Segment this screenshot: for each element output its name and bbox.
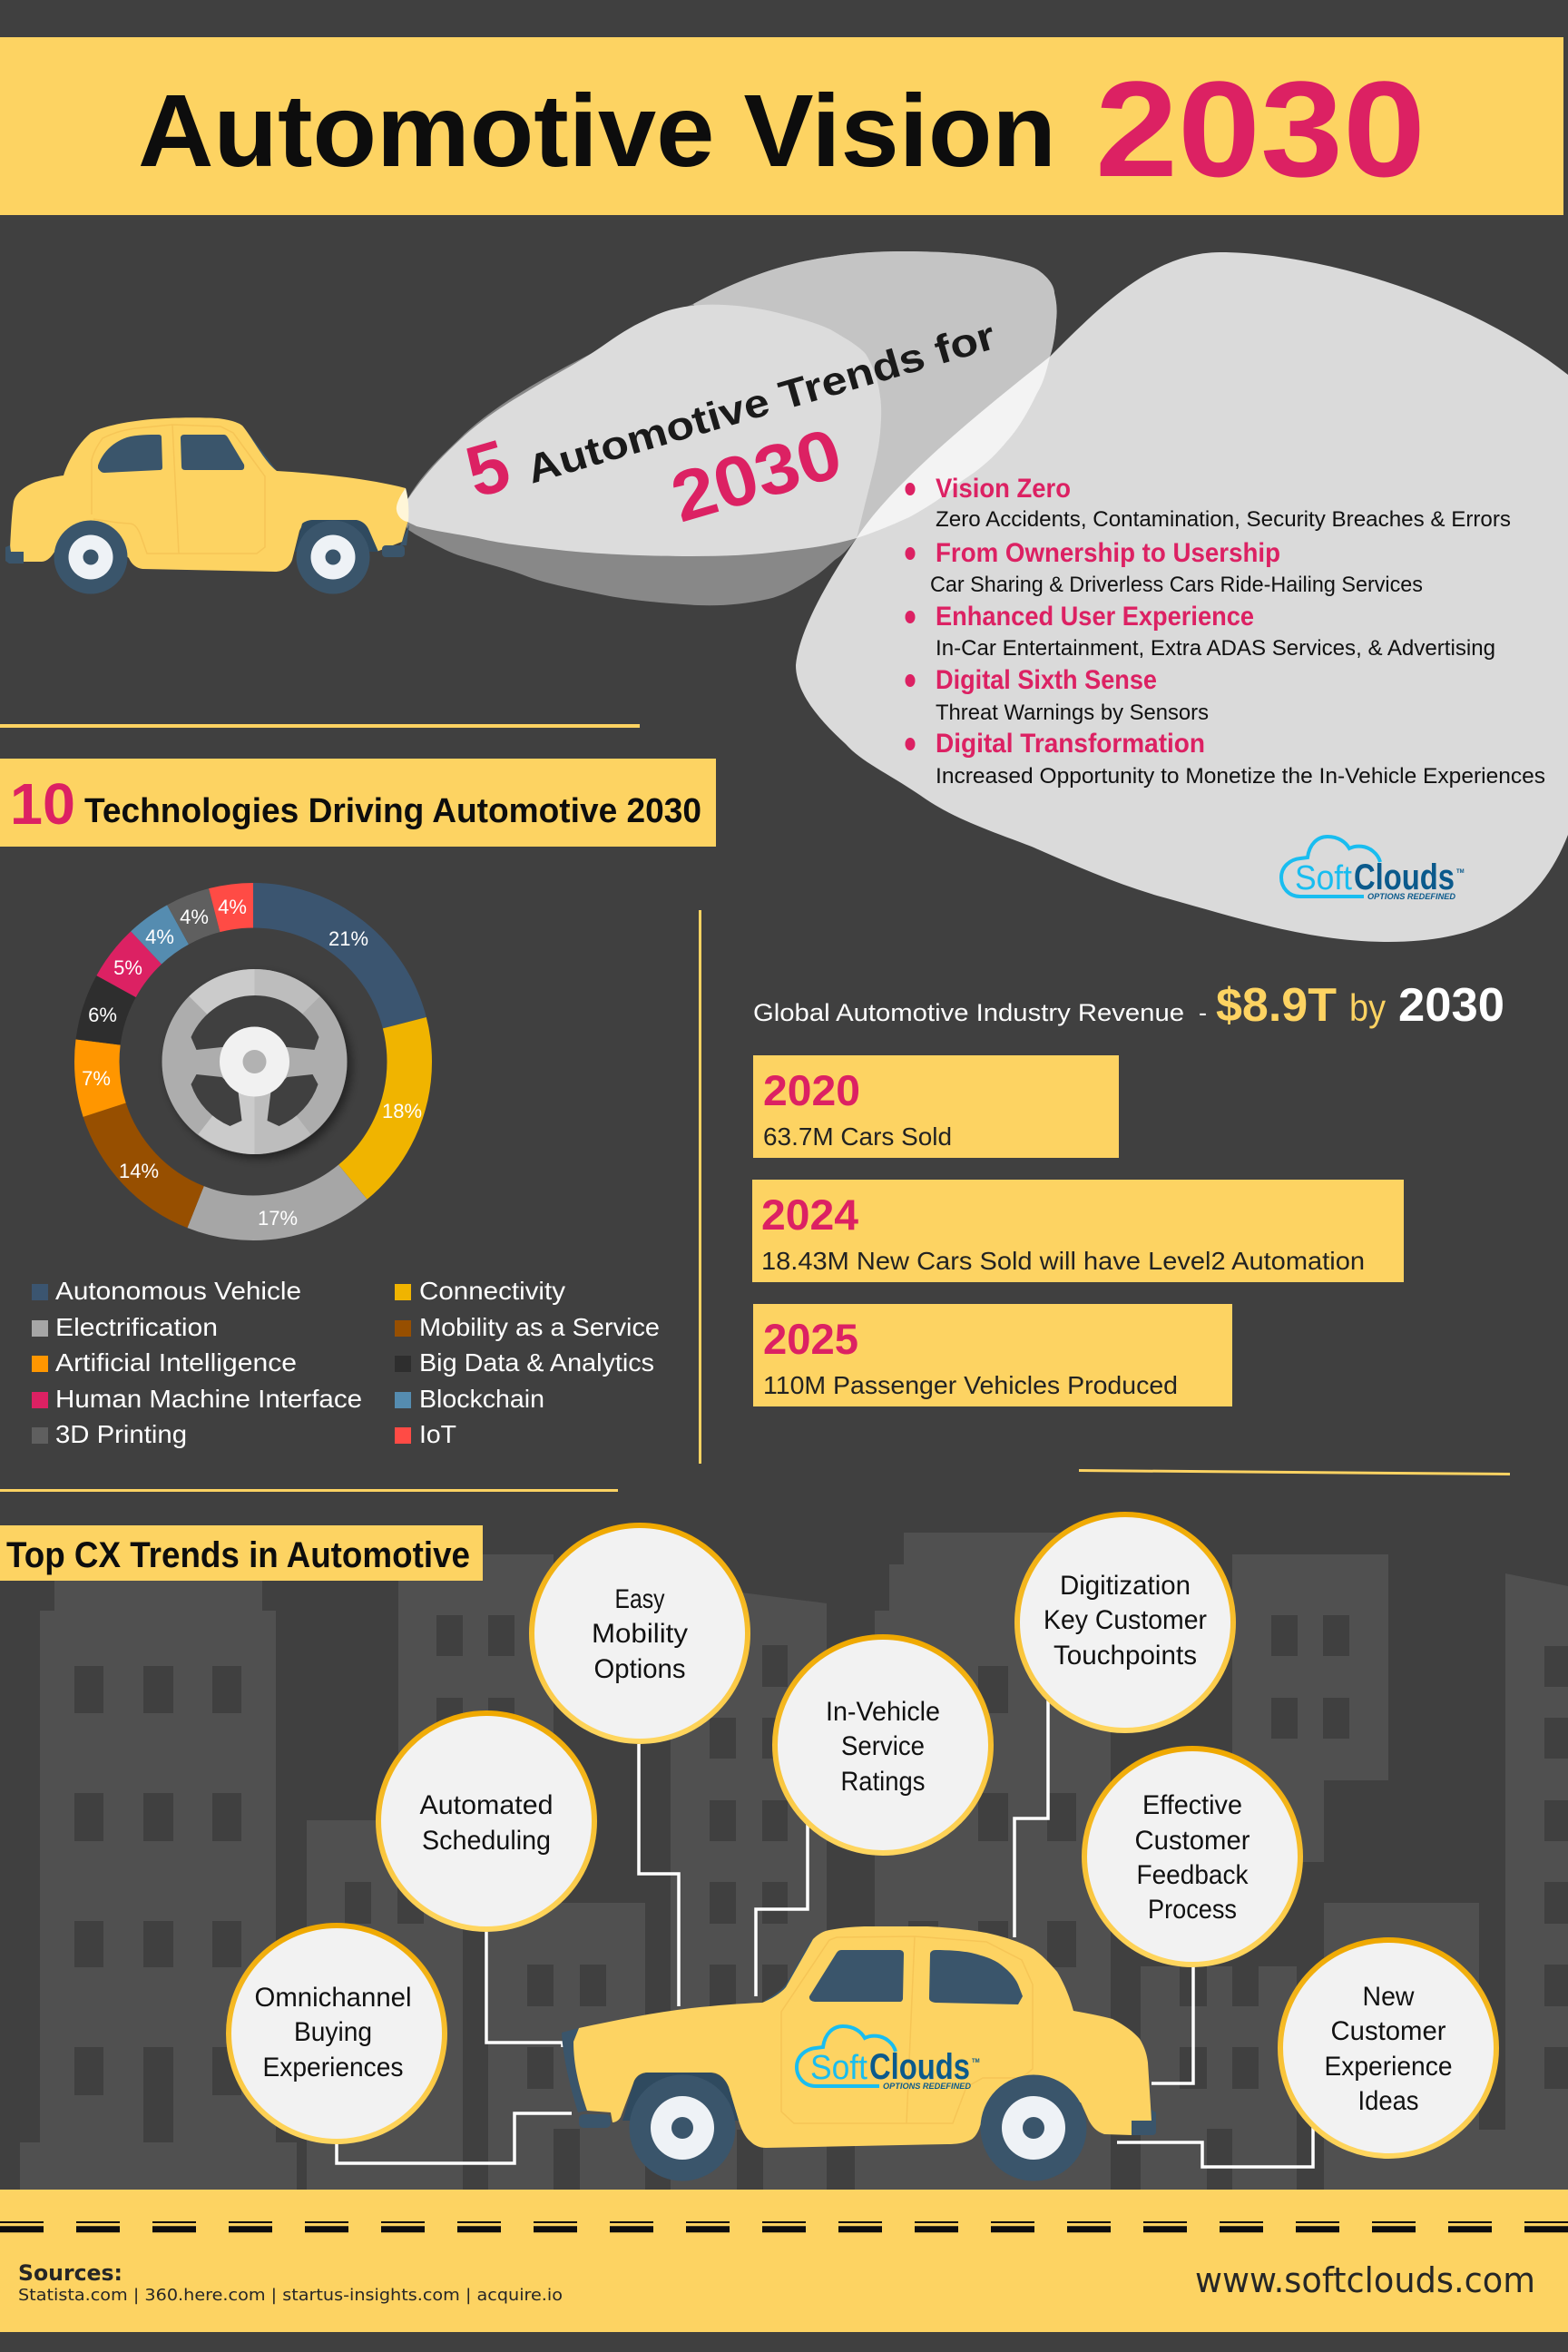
numeral 5: 5 [457, 424, 518, 513]
road band [0, 2190, 1568, 2332]
bubble: omnichannel: Buying [294, 2017, 372, 2047]
bar: 2024 [752, 1180, 1404, 1282]
bar: 2025: 110M Passenger Vehicles Produced [763, 1371, 1178, 1399]
bar: 2020: 2020 [763, 1066, 860, 1114]
bubble: easy mobility [532, 1525, 748, 1741]
trend 5 [906, 729, 1545, 789]
legend left column [32, 1277, 362, 1448]
bubble: in-vehicle ratings: In-Vehicle [826, 1697, 940, 1727]
bubble: omnichannel [229, 1926, 445, 2141]
trend 1: Vision Zero [936, 474, 1071, 504]
trend 5: Digital Transformation [936, 729, 1205, 759]
divider: vertical [699, 910, 701, 1464]
legend left column: Electrification [55, 1313, 218, 1341]
trends list [906, 474, 1545, 789]
bar: 2020: 63.7M Cars Sold [763, 1122, 952, 1151]
legend right column: Big Data & Analytics [419, 1348, 654, 1377]
sources: Statista.com | 360.here.com | startus-insights.com | acquire.io [18, 2286, 563, 2305]
revenue figure: $8.9T [1216, 979, 1337, 1032]
trend 1 [906, 474, 1511, 532]
trend 4: Digital Sixth Sense [936, 665, 1157, 695]
bar: 2020 [753, 1055, 1119, 1158]
bubble: in-vehicle ratings [775, 1637, 991, 1853]
bar: 2025 [753, 1304, 1232, 1406]
car: side view with headlights [5, 417, 409, 593]
bubble: digitization: Digitization [1060, 1571, 1191, 1601]
title year: 2030 [1095, 53, 1426, 205]
logo: SoftClouds on car: Soft [810, 2049, 867, 2087]
legend right column: Blockchain [419, 1385, 544, 1413]
donut percentage labels: 7% [82, 1067, 111, 1090]
title text: Automotive Vision [138, 74, 1056, 188]
donut percentage labels: 4% [145, 926, 174, 948]
banner text: Technologies Driving Automotive 2030 [84, 792, 701, 830]
bubble: in-vehicle ratings: Ratings [840, 1767, 926, 1797]
heading year: 2030 [662, 413, 850, 537]
trend 5: Increased Opportunity to Monetize the In-Vehicle Experiences [936, 764, 1545, 789]
logo: SoftClouds on blob [1281, 837, 1465, 901]
legend right column: Connectivity [419, 1277, 565, 1305]
revenue headline: - [1199, 999, 1207, 1026]
bubble: omnichannel: Omnichannel [254, 1983, 412, 2013]
donut percentage labels: 18% [382, 1100, 422, 1122]
bubble: new CX ideas: Customer [1330, 2016, 1446, 2046]
bubble: automated scheduling: Scheduling [422, 1826, 551, 1856]
donut percentage labels: 17% [258, 1207, 298, 1230]
divider: lower left [0, 1489, 618, 1492]
bubble: in-vehicle ratings: Service [841, 1731, 925, 1761]
trends blob [796, 252, 1568, 942]
car: side view with logo [562, 1926, 1156, 2181]
bubble: digitization: Touchpoints [1054, 1641, 1197, 1671]
banner numeral: 10 [10, 771, 75, 837]
trend 4: Threat Warnings by Sensors [936, 701, 1209, 725]
bubble: digitization: Key Customer [1044, 1605, 1207, 1635]
bubble: feedback: Feedback [1136, 1860, 1249, 1890]
logo: SoftClouds on blob: Clouds [1354, 858, 1455, 897]
bubble: feedback: Effective [1142, 1790, 1242, 1820]
trend 2: From Ownership to Usership [936, 538, 1280, 568]
beam highlight on nose [397, 488, 408, 522]
logo: SoftClouds on car [797, 2026, 980, 2091]
section banner: 10 technologies [0, 759, 716, 847]
website url: www.softclouds.com [1195, 2260, 1535, 2300]
connector lines [337, 1700, 1313, 2167]
section banner: top CX trends: Top CX Trends in Automotive [6, 1535, 470, 1575]
legend left column: 3D Printing [55, 1420, 187, 1448]
trend 2: Car Sharing & Driverless Cars Ride-Hailing Services [930, 573, 1423, 597]
heading line: Automotive Trends for [522, 313, 1000, 493]
trend 2 [906, 538, 1423, 597]
donut percentage labels: 21% [328, 927, 368, 950]
trend 3 [906, 602, 1495, 661]
bubble: new CX ideas: Ideas [1357, 2086, 1419, 2116]
legend [32, 1277, 660, 1448]
bubble: digitization [1017, 1514, 1233, 1730]
bubble: new CX ideas: Experience [1325, 2052, 1452, 2082]
donut percentage labels: 14% [119, 1160, 159, 1182]
trend 1: Zero Accidents, Contamination, Security Breaches & Errors [936, 507, 1511, 532]
logo: SoftClouds on blob: TM [1456, 869, 1465, 875]
bubble: feedback: Process [1148, 1895, 1237, 1925]
donut percentage labels: 6% [88, 1004, 117, 1026]
trend 3: In-Car Entertainment, Extra ADAS Services, & Advertising [936, 636, 1495, 661]
bubble: feedback [1084, 1749, 1300, 1965]
logo: SoftClouds on blob: Soft [1295, 859, 1352, 897]
donut percentage labels: 4% [218, 896, 247, 918]
divider: upper left [0, 724, 640, 728]
icon: steering wheel [162, 969, 347, 1154]
bubble: new CX ideas: New [1363, 1982, 1415, 2012]
donut percentage labels: 5% [113, 956, 142, 979]
logo: SoftClouds on blob: OPTIONS REDEFINED [1367, 892, 1456, 901]
legend right column [395, 1277, 660, 1448]
donut percentage labels: 4% [180, 906, 209, 928]
donut percentage labels [82, 896, 422, 1230]
trend 3: Enhanced User Experience [936, 602, 1254, 632]
sources: Sources: [18, 2260, 122, 2286]
headlight beams [403, 251, 1057, 605]
sources [18, 2260, 563, 2305]
bubble: new CX ideas [1280, 1940, 1496, 2156]
bubble: easy mobility: Easy [615, 1584, 664, 1614]
logo: SoftClouds on car: TM [972, 2059, 980, 2064]
donut chart [97, 906, 409, 1218]
bar: 2024: 2024 [761, 1191, 858, 1239]
legend left column: Human Machine Interface [55, 1385, 362, 1413]
bubble: omnichannel: Experiences [263, 2053, 403, 2082]
revenue headline: Global Automotive Industry Revenue [753, 999, 1184, 1026]
section banner: top CX trends [0, 1525, 483, 1581]
bar: 2025: 2025 [763, 1315, 858, 1363]
bubble: automated scheduling: Automated [419, 1790, 554, 1820]
legend left column: Autonomous Vehicle [55, 1277, 301, 1305]
city skyline background [20, 1533, 1568, 2190]
logo: SoftClouds on car: OPTIONS REDEFINED [883, 2082, 972, 2091]
logo: SoftClouds on car: Clouds [869, 2047, 970, 2087]
bubble: easy mobility: Mobility [592, 1619, 688, 1649]
road markings [0, 2221, 1568, 2223]
legend right column: IoT [419, 1420, 456, 1448]
title band [0, 37, 1563, 215]
divider: right [1079, 1469, 1510, 1475]
revenue headline: by [1349, 986, 1386, 1029]
beam and blob overlap [857, 357, 1050, 538]
heading: 5 automotive trends [457, 313, 1000, 537]
bubble: easy mobility: Options [593, 1654, 686, 1684]
bar: 2024: 18.43M New Cars Sold will have Level2 Automation [761, 1247, 1365, 1275]
trend 4 [906, 665, 1209, 725]
bubble: automated scheduling [378, 1713, 594, 1929]
legend right column: Mobility as a Service [419, 1313, 660, 1341]
revenue headline [753, 979, 1504, 1032]
legend left column: Artificial Intelligence [55, 1348, 297, 1377]
revenue headline: 2030 [1398, 979, 1504, 1032]
bubble: feedback: Customer [1134, 1826, 1250, 1856]
